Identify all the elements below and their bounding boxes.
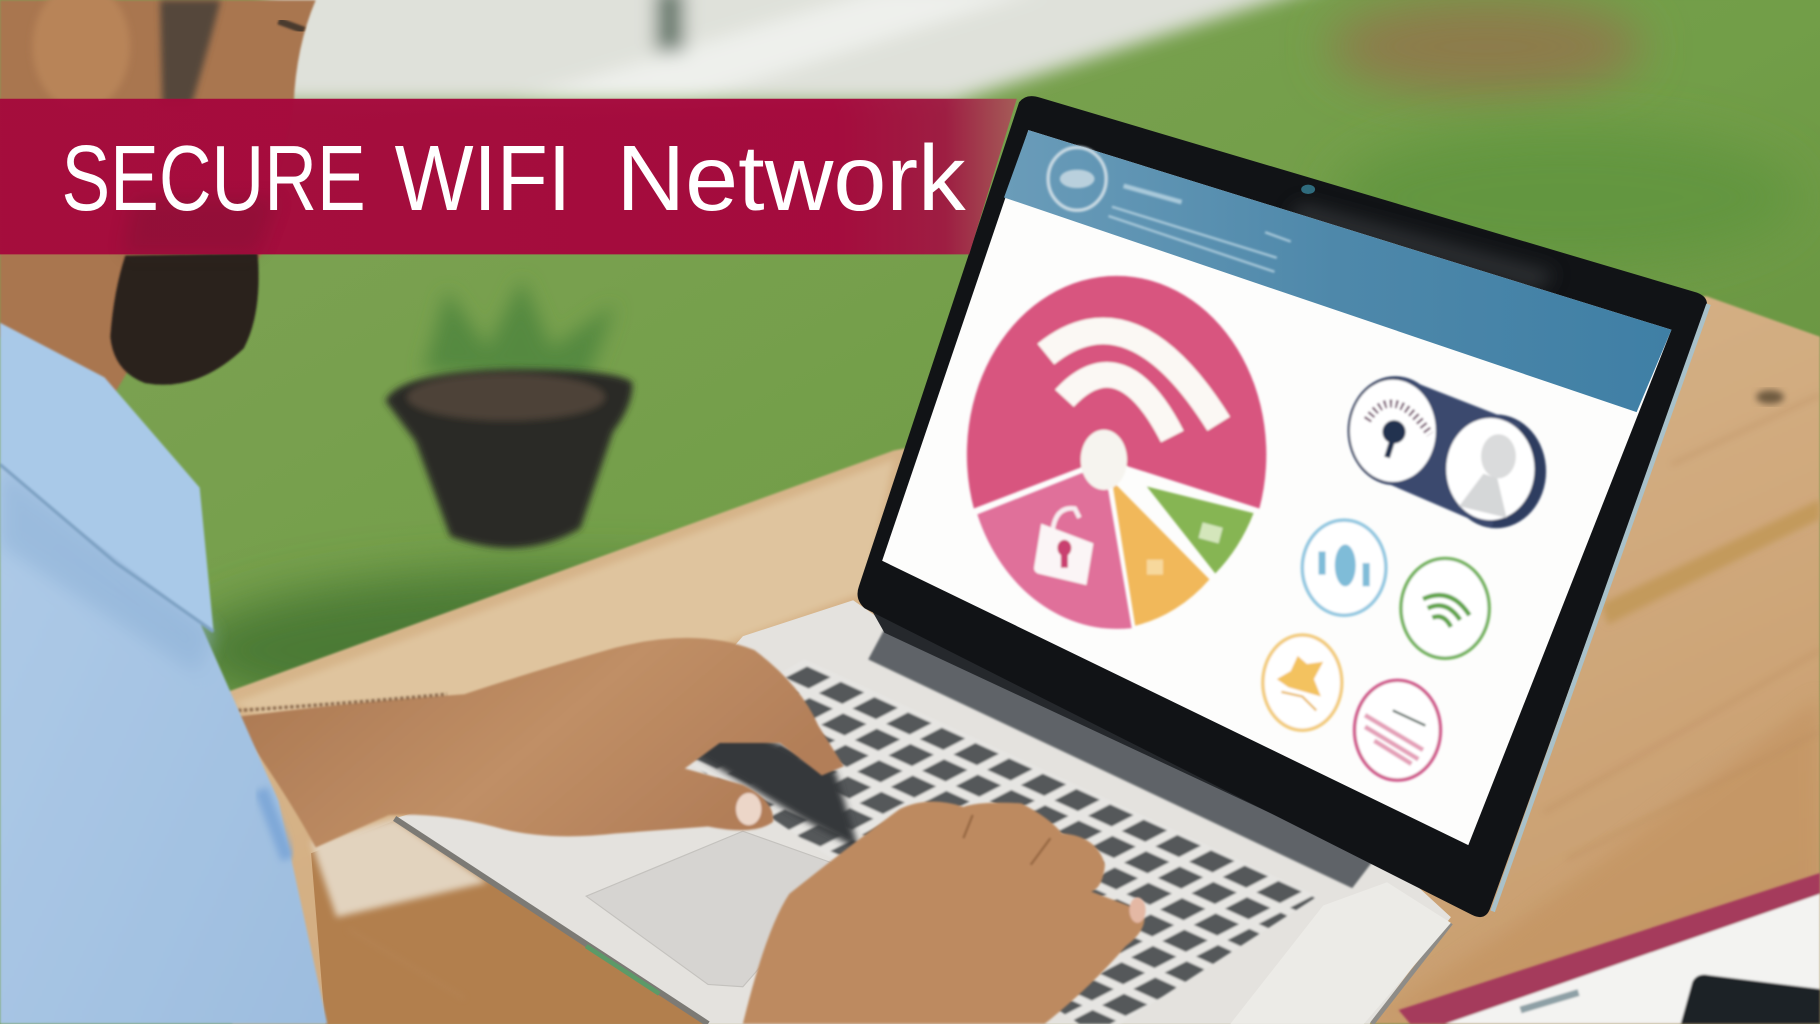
shirt collar	[0, 323, 214, 632]
pie slice: yellow	[1112, 481, 1209, 626]
small icon on green slice	[1198, 522, 1223, 543]
man: head and neck	[0, 0, 316, 401]
small icon on yellow slice	[1147, 560, 1163, 575]
pie hub	[1081, 430, 1127, 490]
right palm rest	[1230, 882, 1451, 1024]
trackpad	[586, 831, 847, 987]
screen header band	[1004, 130, 1671, 412]
laptop front edge	[395, 818, 708, 1024]
header logo	[1048, 148, 1106, 210]
wifi arcs	[1046, 331, 1219, 424]
wooden table	[215, 296, 1820, 1024]
title banner	[0, 99, 1017, 254]
icon: green wifi circle	[1401, 558, 1489, 658]
laptop base	[395, 600, 1451, 1024]
background: garden path	[267, 0, 1346, 102]
pie slice: lock	[977, 464, 1132, 629]
man: left hand and arm	[232, 638, 844, 847]
header text lines	[1108, 186, 1291, 272]
hair	[160, 0, 221, 105]
keyhole icon	[1481, 434, 1516, 478]
icon: pink circle	[1355, 680, 1440, 780]
paper	[1445, 894, 1820, 1024]
pie chart	[967, 276, 1266, 629]
screen outer edge	[1493, 304, 1709, 911]
pie slice: wifi	[967, 276, 1266, 509]
man: shirt	[0, 323, 327, 1024]
icon: blue circle	[1302, 520, 1386, 615]
laptop	[395, 96, 1709, 1024]
toggle capsule icon	[1348, 376, 1546, 528]
lock icon	[1034, 508, 1093, 585]
gauge needle	[1382, 420, 1406, 444]
ear	[32, 0, 130, 110]
wood grain	[348, 395, 1820, 998]
gauge ticks	[1367, 404, 1430, 434]
red folder	[1399, 873, 1820, 1024]
phone	[1681, 975, 1820, 1024]
bezel reflection	[1288, 203, 1555, 290]
title: SECURE	[62, 126, 366, 230]
hinge bar	[868, 627, 1379, 888]
folder and phone	[1399, 873, 1820, 1024]
beard	[110, 253, 259, 385]
title: Network	[616, 126, 966, 230]
keyboard	[659, 659, 1317, 1024]
screen display	[882, 130, 1671, 845]
screen bezel	[858, 96, 1707, 917]
pie slice: green	[1147, 486, 1254, 574]
man: right hand	[743, 802, 1146, 1024]
icon: yellow circle	[1263, 635, 1342, 730]
laptop right edge	[1372, 923, 1451, 1024]
webcam	[1301, 185, 1315, 194]
background: potted plant	[385, 279, 633, 548]
title	[62, 126, 966, 230]
title: WIFI	[395, 126, 571, 230]
